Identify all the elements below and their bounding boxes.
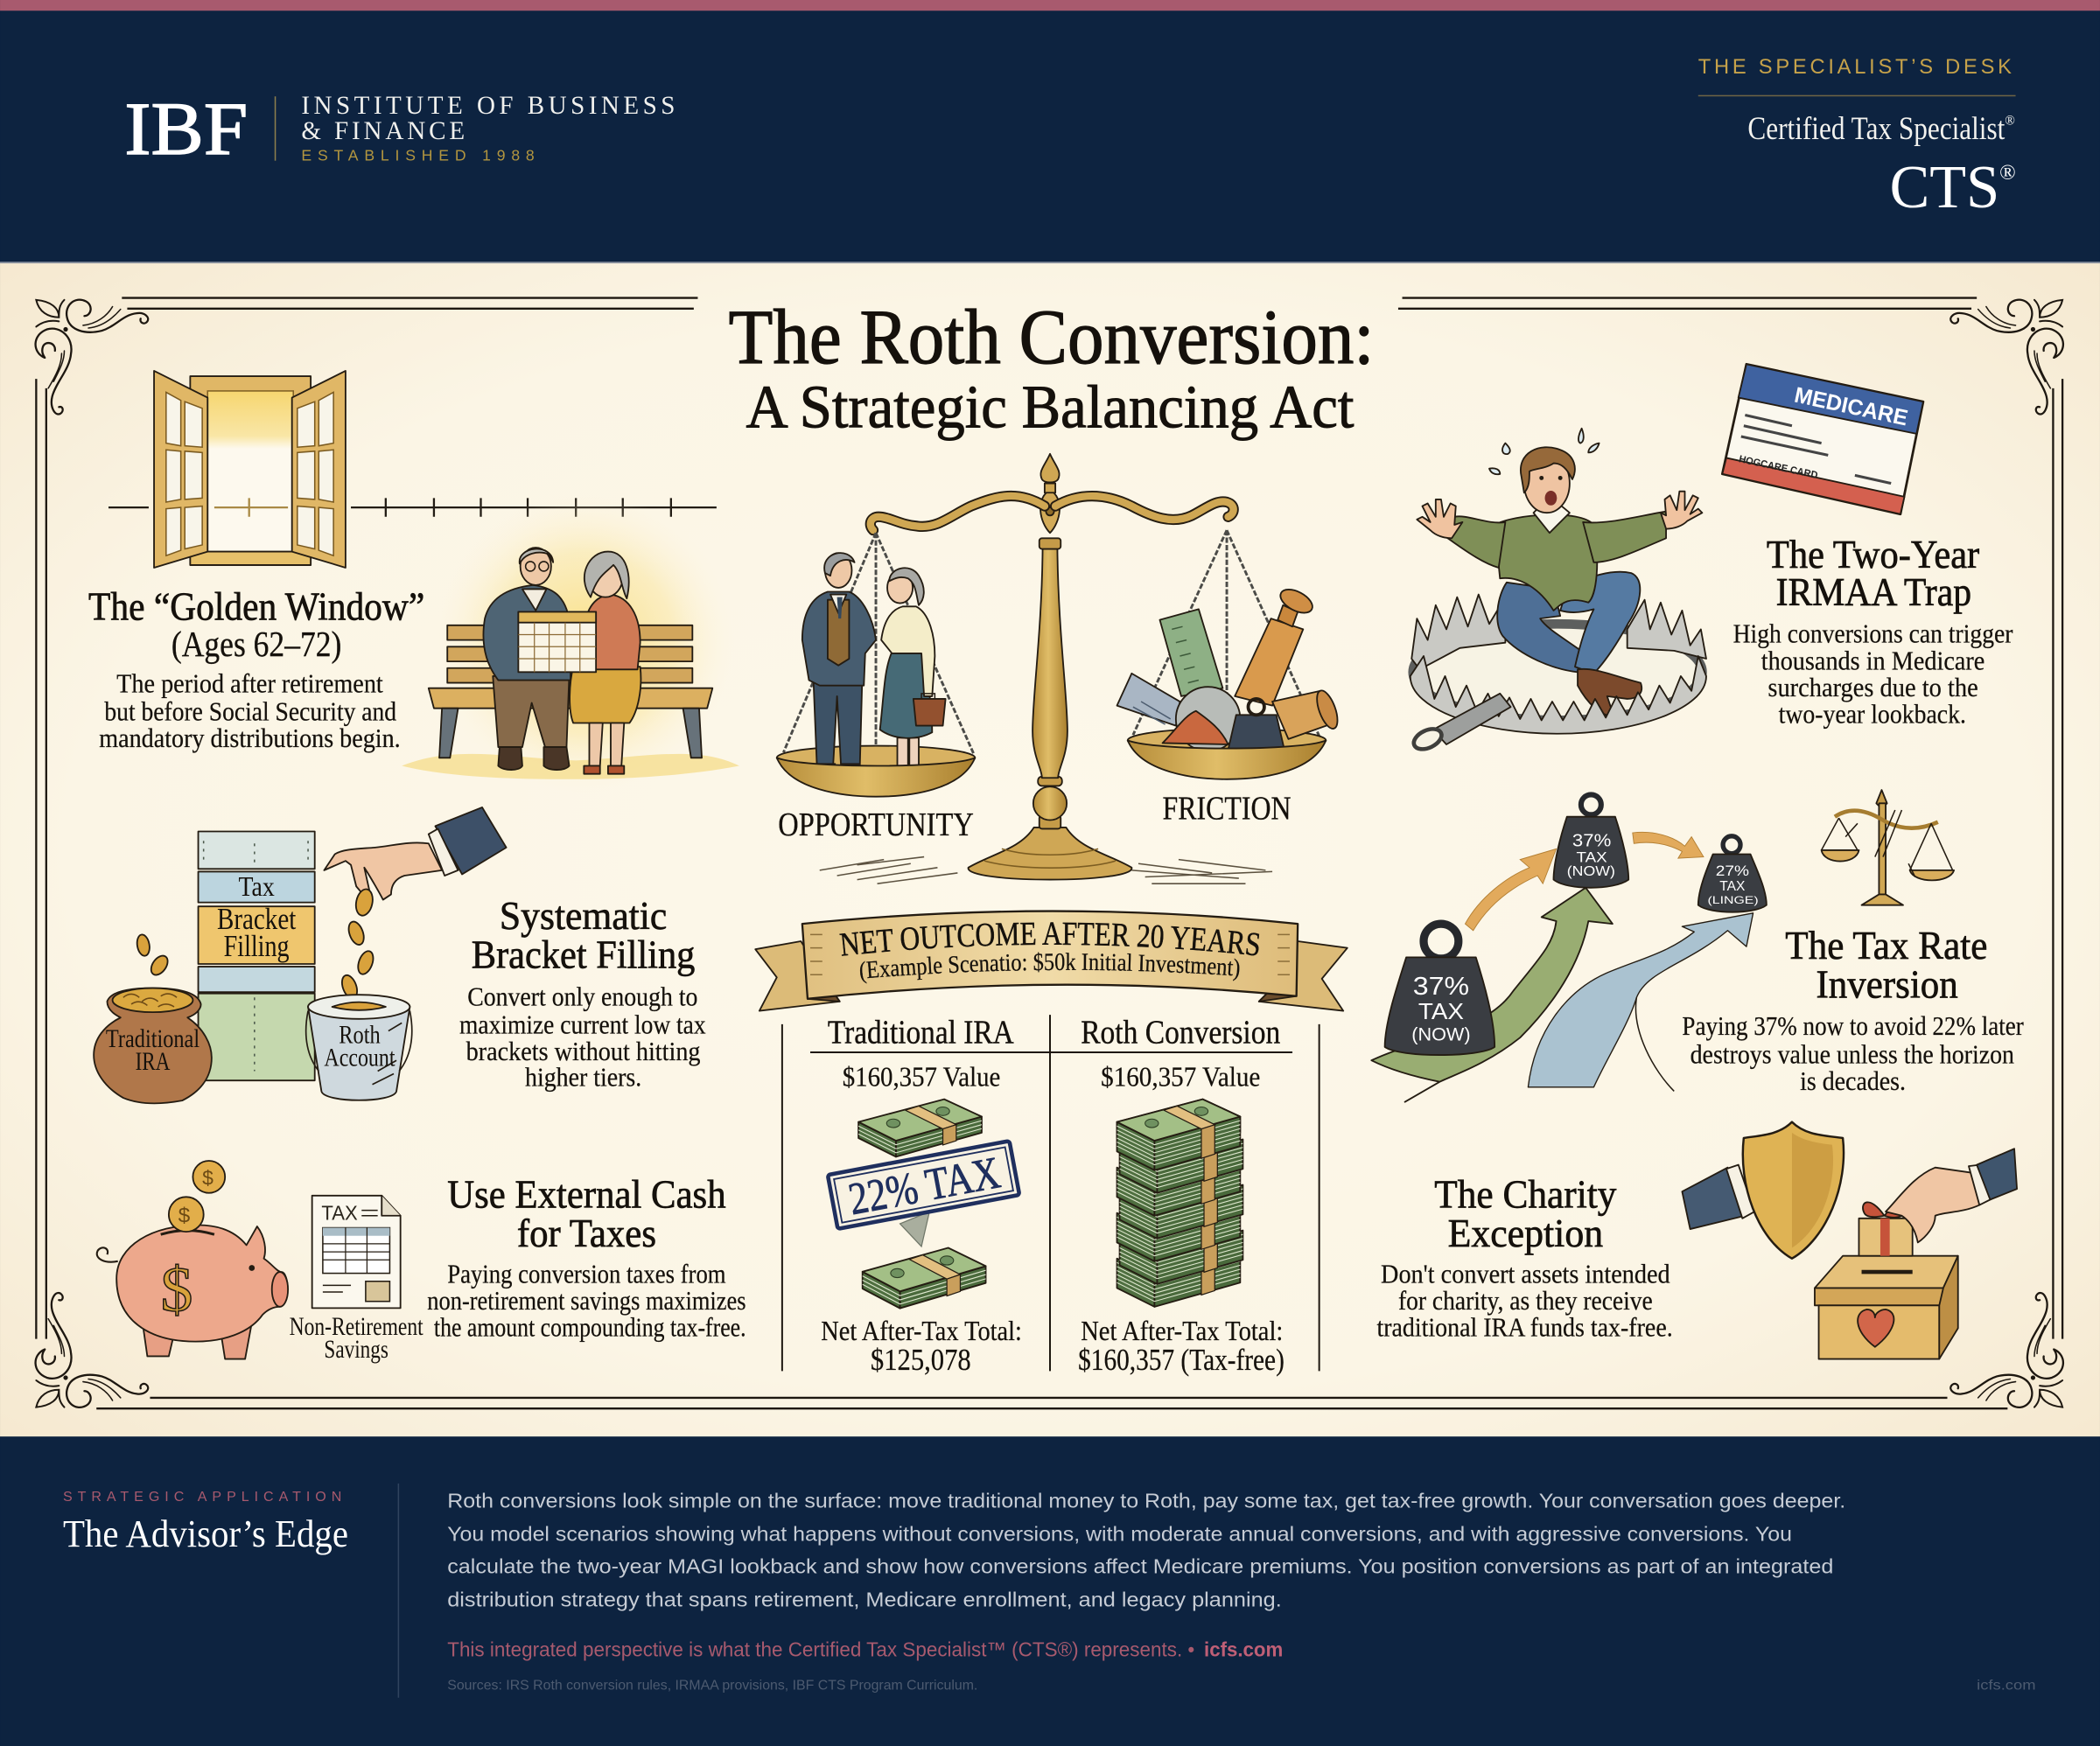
text: charity description: traditional IRA funds tax-free. (1376, 1313, 1673, 1343)
panel: bracket filling (94, 807, 706, 1103)
panel: tax rate inversion (1371, 790, 2024, 1102)
text: golden window description: but before Social Security and (104, 696, 396, 726)
illustration: medicare card: HOGCARE CARD (1738, 454, 1818, 481)
column: traditional IRA (821, 1014, 1022, 1377)
header band (0, 0, 2100, 262)
heading: tax rate inversion: The Tax Rate (1785, 923, 1987, 967)
scale: beam (871, 496, 1234, 530)
heading: tax rate inversion (1785, 923, 1987, 1006)
illustration: piggy bank: $ (178, 1204, 191, 1227)
illustration: tax document (312, 1196, 401, 1308)
stamp: 22% tax: 22% TAX (844, 1148, 1004, 1225)
weight: small 27% (1698, 836, 1767, 912)
panel: external cash (97, 1161, 746, 1364)
weight: large 37%: TAX (1418, 998, 1464, 1024)
label: friction: FRICTION (1163, 791, 1292, 828)
column: roth conversion: $160,357 Value (1101, 1060, 1260, 1092)
text: IRMAA description: High conversions can trigger (1733, 619, 2012, 649)
ornamental border (36, 298, 2063, 1408)
illustration: medicare card (1722, 364, 1923, 514)
icon: arrow down (900, 1212, 929, 1247)
text: bracket filling description (459, 981, 706, 1092)
left pan chains (783, 533, 974, 763)
heading: external cash: Use External Cash (447, 1172, 726, 1217)
text: IRMAA description: thousands in Medicare (1761, 646, 1984, 675)
logo: IBF (124, 87, 675, 171)
heading: external cash: for Taxes (517, 1211, 656, 1255)
footer: advisor's edge heading: The Advisor’s Edge (63, 1512, 348, 1555)
column: traditional IRA: $125,078 (871, 1343, 971, 1377)
heading: IRMAA trap: IRMAA Trap (1776, 569, 1971, 614)
text: golden window description: The period after retirement (116, 668, 383, 698)
illustration: roth bucket: Account (324, 1044, 396, 1072)
heading: charity exception: The Charity (1434, 1172, 1616, 1217)
illustration: traditional IRA pot: Traditional (106, 1025, 200, 1053)
column: roth conversion: Net After-Tax Total: (1081, 1315, 1283, 1346)
heading: IRMAA trap (1767, 532, 1979, 614)
text: tax rate description: is decades. (1800, 1066, 1906, 1096)
illustration: roth bucket: Roth (339, 1021, 381, 1049)
text: external cash description: Paying conversion taxes from (447, 1259, 726, 1289)
label: non-retirement savings: Savings (324, 1336, 388, 1364)
illustration: medicare card: MEDICARE (1792, 383, 1910, 430)
figures: couple on the pan (802, 553, 946, 772)
weight: large 37%: 37% (1413, 973, 1469, 1001)
heading: external cash (447, 1172, 726, 1255)
heading: IRMAA trap: The Two-Year (1767, 532, 1979, 576)
banner title: NET OUTCOME AFTER 20 YEARS (839, 922, 1260, 956)
weight: medium 37%: 37% (1572, 831, 1611, 850)
text: bracket filling description: maximize current low tax (459, 1010, 706, 1040)
label: opportunity: OPPORTUNITY (778, 807, 974, 843)
front jaw (1410, 656, 1706, 734)
text: IRMAA description (1733, 619, 2012, 730)
left pan back (777, 746, 975, 770)
specialist desk badge: THE SPECIALIST’S DESK (1698, 56, 2012, 79)
top accent bar (0, 0, 2100, 10)
illustration: tax document: TAX (321, 1201, 358, 1224)
illustration: piggy bank: $ (161, 1254, 192, 1324)
text: IRMAA description: surcharges due to the (1768, 673, 1978, 702)
heading: bracket filling: Systematic (500, 893, 667, 938)
weight: small 27%: TAX (1719, 879, 1745, 894)
illustration: shield, hands and donation box (1682, 1122, 2017, 1359)
title: A Strategic Balancing Act (746, 373, 1354, 441)
label: non-retirement savings: Non-Retirement (290, 1313, 424, 1341)
woman (570, 667, 640, 723)
heading: charity exception: Exception (1448, 1211, 1603, 1255)
label: non-retirement savings (290, 1313, 424, 1364)
footer: body paragraph: Roth conversions look simple on the surface: move traditional money to Roth, pay some tax, get tax-free growth. Your conversation goes deeper. (447, 1489, 1845, 1512)
footer: call to action: This integrated perspective is what the Certified Tax Specialist™ (CTS®) represents. • (447, 1638, 1194, 1660)
logo: IBF: INSTITUTE OF BUSINESS (301, 92, 675, 120)
specialist desk badge: Certified Tax Specialist (1747, 110, 2005, 146)
weight: large 37% (1385, 924, 1494, 1055)
icon: money bundle before tax (858, 1100, 982, 1156)
heading: charity exception (1434, 1172, 1616, 1255)
specialist desk badge: ® (2005, 113, 2015, 128)
illustration: traditional IRA pot (94, 933, 212, 1103)
right pan back (1128, 729, 1326, 752)
illustration: bracket tower (199, 831, 315, 1080)
text: external cash description: the amount compounding tax-free. (434, 1313, 746, 1343)
icon: broken scales (1822, 790, 1954, 905)
heading: golden window: The “Golden Window” (88, 584, 424, 629)
calendar (518, 611, 596, 672)
weight: large 37%: (NOW) (1411, 1023, 1471, 1044)
footer: advisor's edge heading: STRATEGIC APPLICATION (63, 1489, 341, 1505)
footer: body paragraph (447, 1489, 1845, 1611)
panel: IRMAA trap (1410, 364, 2012, 753)
illustration: couple on bench with calendar (402, 492, 739, 793)
footer: body paragraph: calculate the two-year MAGI lookback and show how conversions affect Medicare premiums. You position conversions as part of an integrated (447, 1554, 1833, 1577)
scale: stand (969, 454, 1131, 880)
title: The Roth Conversion: (729, 295, 1374, 381)
illustration: roth bucket (306, 995, 412, 1100)
weight: medium 37%: (NOW) (1567, 864, 1615, 879)
column: roth conversion: $160,357 (Tax-free) (1078, 1343, 1284, 1377)
panel: central balance scale (777, 454, 1341, 883)
friction objects (1117, 584, 1341, 751)
illustration: bracket tower: Tax (238, 870, 275, 902)
parchment panel (0, 262, 2100, 1436)
title (729, 295, 1374, 441)
left pan bowl (777, 758, 975, 797)
logo: IBF: & FINANCE (301, 117, 465, 145)
specialist desk badge (1698, 56, 2016, 221)
man (493, 676, 570, 747)
table rules (782, 1015, 1320, 1371)
text: bracket filling description: higher tiers. (525, 1062, 641, 1092)
illustration: traditional IRA pot: IRA (136, 1048, 170, 1076)
figure: man (1497, 583, 1588, 672)
footer: url: icfs.com (1977, 1678, 2036, 1694)
illustration: weights and diverging paths (1371, 794, 1767, 1102)
text: tax rate description: destroys value unless the horizon (1690, 1039, 2014, 1069)
illustration: worried man in bear trap (1410, 429, 1706, 753)
icon: tall money stack (1117, 1100, 1242, 1307)
text: bracket filling description: brackets without hitting (466, 1037, 701, 1066)
text: external cash description (427, 1259, 746, 1343)
illustration: bracket tower: Bracket (217, 902, 296, 936)
logo: IBF: IBF (124, 87, 248, 171)
text: external cash description: non-retirement savings maximizes (427, 1286, 746, 1316)
column: roth conversion: Roth Conversion (1081, 1014, 1280, 1051)
heading: bracket filling (472, 893, 695, 977)
text: tax rate description (1682, 1011, 2024, 1096)
column: traditional IRA: $160,357 Value (843, 1060, 1000, 1092)
weight: small 27%: (LINGE) (1708, 894, 1759, 906)
footer band (0, 1436, 2100, 1746)
illustration: piggy bank (97, 1161, 288, 1359)
heading: bracket filling: Bracket Filling (472, 932, 695, 977)
footer: sources: Sources: IRS Roth conversion rules, IRMAA provisions, IBF CTS Program Curriculum. (447, 1678, 977, 1694)
panel: golden window (88, 371, 739, 793)
subheading: ages: (Ages 62–72) (172, 624, 341, 665)
panel: charity exception (1376, 1122, 2017, 1359)
icon: money bundle after tax (863, 1248, 986, 1309)
illustration: open window on timeline (108, 371, 717, 568)
text: charity description: Don't convert assets intended (1381, 1259, 1670, 1289)
column: roth conversion (1078, 1014, 1284, 1377)
specialist desk badge: ® (1999, 161, 2016, 185)
illustration: hand dropping coin (324, 807, 507, 1001)
panel: net outcome comparison (754, 910, 1348, 1377)
text: bracket filling description: Convert only enough to (467, 981, 697, 1011)
footer: advisor's edge heading (63, 1489, 348, 1555)
right pan chains (1133, 530, 1320, 739)
footer: body paragraph: distribution strategy that spans retirement, Medicare enrollment, and legacy planning. (447, 1589, 1282, 1611)
illustration: bracket tower: Filling (224, 929, 290, 963)
text: tax rate description: Paying 37% now to avoid 22% later (1682, 1011, 2024, 1041)
banner subtitle: (Example Scenatio: $50k Initial Investment) (859, 952, 1239, 983)
logo: IBF: ESTABLISHED 1988 (301, 147, 535, 164)
text: IRMAA description: two-year lookback. (1779, 700, 1966, 730)
illustration: piggy bank: $ (202, 1167, 214, 1190)
base shadow hatching (820, 857, 1272, 883)
footer: call to action: icfs.com (1204, 1638, 1283, 1660)
specialist desk badge: CTS (1890, 153, 1999, 221)
weight: medium 37%: TAX (1577, 849, 1607, 866)
banner (754, 910, 1348, 1011)
weight: small 27%: 27% (1716, 863, 1749, 879)
column: traditional IRA: Traditional IRA (828, 1014, 1014, 1051)
footer: body paragraph: You model scenarios showing what happens without conversions, with moderate annual conversions, and with aggressive conversions. You (447, 1523, 1792, 1546)
text: charity description: for charity, as they receive (1398, 1286, 1653, 1316)
weight: medium 37% (1553, 794, 1628, 888)
right pan bowl (1128, 740, 1326, 779)
text: golden window description: mandatory distributions begin. (99, 723, 401, 753)
text: golden window description (99, 668, 401, 753)
text: charity description (1376, 1259, 1673, 1343)
heading: tax rate inversion: Inversion (1816, 961, 1958, 1006)
column: traditional IRA: Net After-Tax Total: (821, 1315, 1022, 1346)
